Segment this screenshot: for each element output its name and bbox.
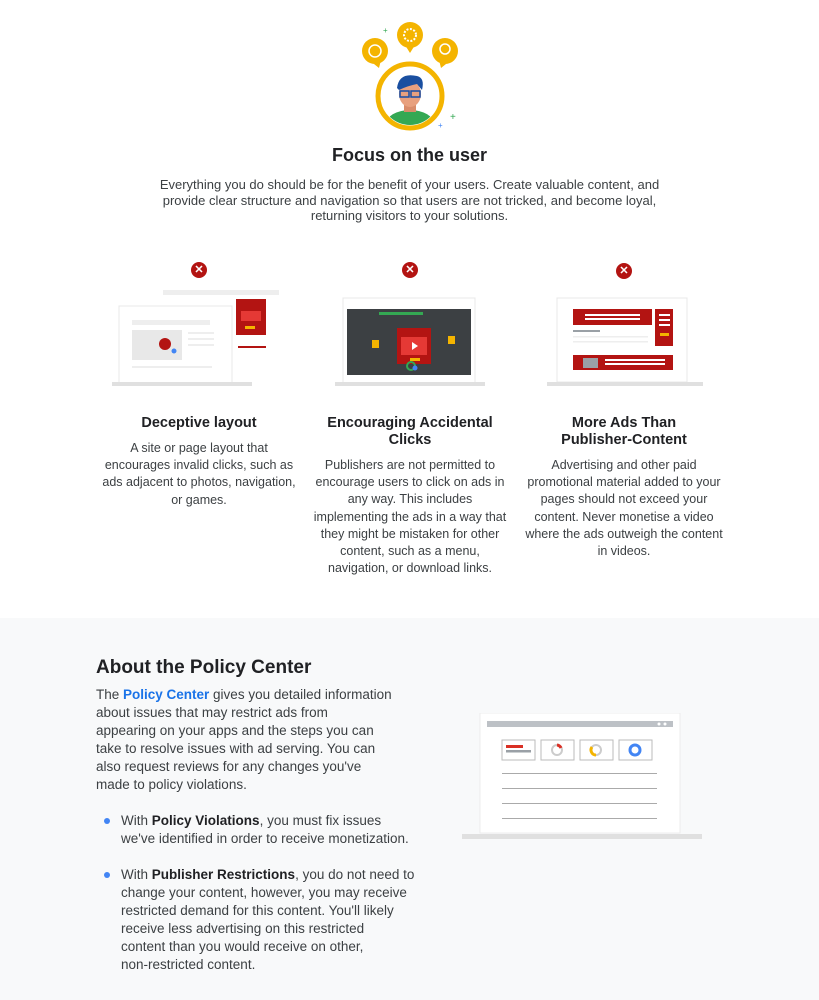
bullet list: change your content, however, you may receive <box>121 885 407 900</box>
icon: x 2: ✕ <box>405 264 415 276</box>
paragraph: The Policy Center gives you detailed information <box>96 687 392 702</box>
paragraph: also request reviews for any changes you've <box>96 759 361 774</box>
hero illustration: user avatar with icons <box>362 22 458 130</box>
icon: x 2 <box>402 262 418 278</box>
icon: x 3 <box>616 263 632 279</box>
illustration: policy center laptop <box>462 713 702 839</box>
illustration: deceptive layout <box>112 290 279 386</box>
icon: x 1: ✕ <box>194 264 204 276</box>
bullet list <box>104 813 414 972</box>
column: accidental clicks: Encouraging Accidental Clicks <box>327 415 493 448</box>
illustration: accidental clicks <box>335 298 485 386</box>
column: more ads: Advertising and other paid promotional material added to your pages should not exceed your content. Never monetise a video where the ads outweigh the content in videos. <box>525 458 723 558</box>
bullet list: With Publisher Restrictions, you do not need to <box>121 867 414 882</box>
paragraph: about issues that may restrict ads from <box>96 705 328 720</box>
bullet list: content than you would receive on other, <box>121 939 363 954</box>
hero illustration: user avatar with icons: + <box>438 121 443 130</box>
illustration: more ads than content <box>547 298 703 386</box>
bullet list: restricted demand for this content. You'll likely <box>121 903 394 918</box>
hero illustration: user avatar with icons: + <box>383 26 388 35</box>
column: deceptive layout: A site or page layout that encourages invalid clicks, such as ads adjacent to photos, navigation, or games. <box>102 441 296 507</box>
paragraph: take to resolve issues with ad serving. You can <box>96 741 375 756</box>
column: more ads <box>525 415 723 558</box>
paragraph: appearing on your apps and the steps you can <box>96 723 374 738</box>
bullet list: receive less advertising on this restricted <box>121 921 364 936</box>
bullet list: non-restricted content. <box>121 957 255 972</box>
bullet list: we've identified in order to receive monetization. <box>121 831 409 846</box>
column: more ads: More Ads Than <box>572 415 676 431</box>
panel: about the policy center <box>0 618 819 1000</box>
column: more ads: Publisher-Content <box>561 432 687 448</box>
icon: x 3: ✕ <box>619 265 629 277</box>
intro text: Everything you do should be for the benefit of your users. Create valuable content, and provide clear structure and navigation so that users are not tricked, and become loyal, returning visitors to your solutions. <box>160 177 659 223</box>
icon: x 1 <box>191 262 207 278</box>
column: accidental clicks: Publishers are not permitted to encourage users to click on ads in any way. This includes implementing the ads in a way that they might be mistaken for other content, such as a menu, navigation, or download links. <box>314 458 506 575</box>
title: Focus on the user <box>332 145 487 165</box>
bullet list: With Policy Violations, you must fix issues <box>121 813 381 828</box>
heading: About the Policy Center <box>96 657 311 678</box>
hero illustration: user avatar with icons: + <box>450 112 456 123</box>
paragraph <box>96 687 392 792</box>
column: deceptive layout: Deceptive layout <box>141 415 257 431</box>
paragraph: made to policy violations. <box>96 777 247 792</box>
